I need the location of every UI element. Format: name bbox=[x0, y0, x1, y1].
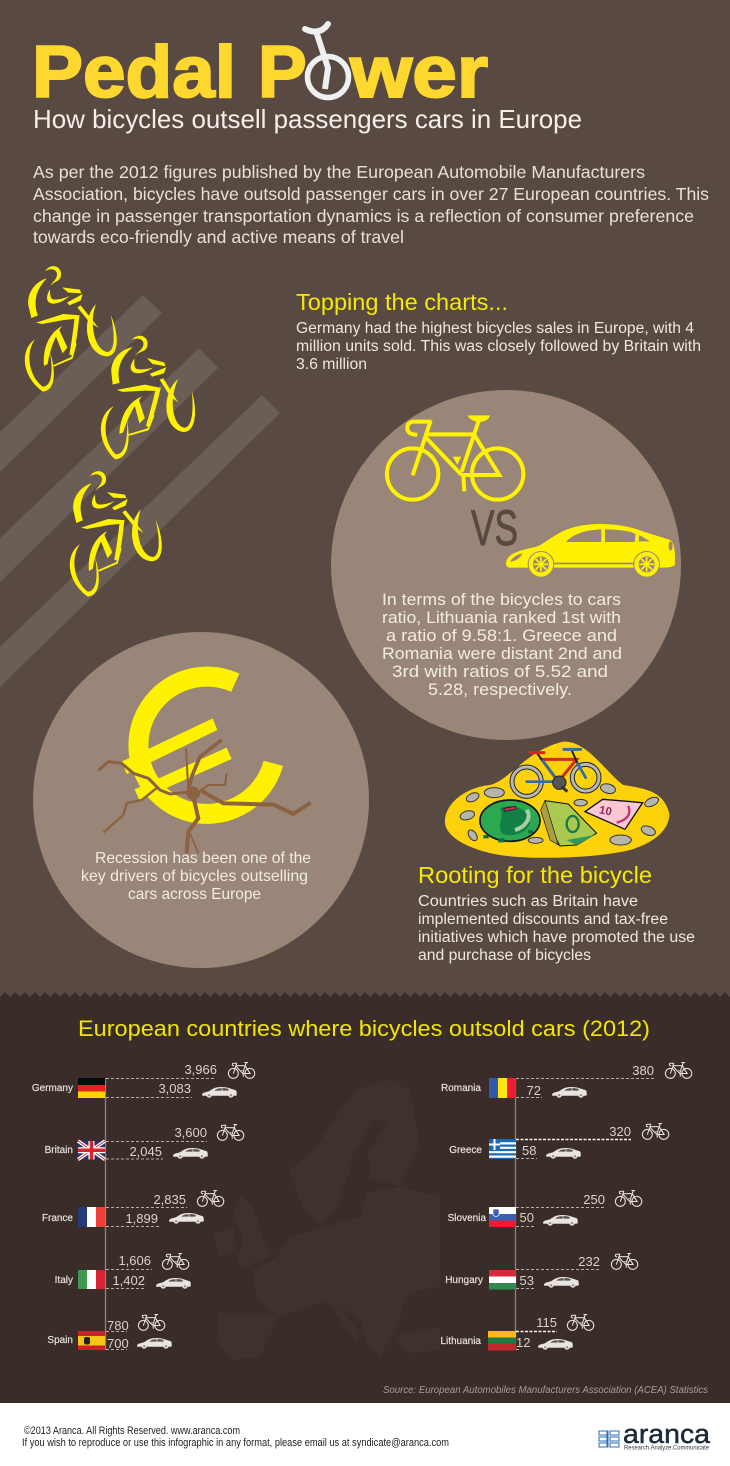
chart axes bbox=[106, 1078, 516, 1350]
title: Pedal Power bbox=[32, 32, 488, 113]
chart row: France: 2,835 bbox=[153, 1192, 186, 1207]
recession text: key drivers of bicycles outselling bbox=[81, 868, 308, 885]
chart row: Romania bbox=[441, 1062, 692, 1098]
chart row: Greece bbox=[449, 1123, 669, 1159]
chart row: Germany: Germany bbox=[32, 1083, 73, 1094]
footer copyright: If you wish to reproduce or use this infographic in any format, please email us at syndicate@aranca.com bbox=[22, 1437, 449, 1449]
recession text: Recession has been one of the bbox=[95, 850, 311, 867]
title: Pedal Power: wer bbox=[349, 32, 488, 113]
ratio text: In terms of the bicycles to cars bbox=[382, 590, 621, 609]
intro paragraph bbox=[33, 162, 709, 247]
chart row: Hungary: Hungary bbox=[445, 1275, 483, 1286]
chart row: Germany: 3,083 bbox=[158, 1081, 191, 1096]
chart row: Britain: Britain bbox=[45, 1145, 73, 1156]
section: topping the charts: million units sold. This was closely followed by Britain with bbox=[296, 338, 701, 355]
icon: bicycle, piggy bank, coins and banknotes on yellow blob: 10 bbox=[598, 804, 613, 818]
ratio text bbox=[382, 590, 622, 699]
section: topping the charts: Germany had the highest bicycles sales in Europe, with 4 bbox=[296, 320, 694, 337]
ratio text: 5.28, respectively. bbox=[428, 680, 572, 699]
chart row: Greece: 58 bbox=[522, 1143, 536, 1158]
title: Pedal Power: P bbox=[258, 32, 307, 113]
section: topping the charts: Topping the charts... bbox=[296, 289, 508, 315]
section: rooting for the bicycle: Countries such as Britain have bbox=[418, 893, 638, 910]
intro paragraph: change in passenger transportation dynamics is a reflection of consumer preference bbox=[33, 206, 694, 226]
chart row: Romania: 72 bbox=[527, 1083, 541, 1098]
icon: cracked euro bbox=[98, 677, 311, 853]
chart row: Hungary: 53 bbox=[520, 1273, 534, 1288]
chart row: Slovenia: Slovenia bbox=[448, 1213, 486, 1224]
chart row: Germany: 3,966 bbox=[184, 1062, 217, 1077]
diagonal road stripes bbox=[0, 295, 280, 687]
chart row: Spain bbox=[47, 1314, 172, 1351]
chart row: Romania: Romania bbox=[441, 1083, 481, 1094]
chart row: Slovenia: 50 bbox=[520, 1210, 534, 1225]
intro paragraph: Association, bicycles have outsold passenger cars in over 27 European countries. This bbox=[33, 184, 709, 204]
section: rooting for the bicycle: and purchase of bicycles bbox=[418, 947, 591, 964]
intro paragraph: As per the 2012 figures published by the European Automobile Manufacturers bbox=[33, 162, 645, 182]
chart row: France bbox=[42, 1190, 224, 1227]
footer copyright: ©2013 Aranca. All Rights Reserved. www.aranca.com bbox=[24, 1425, 240, 1437]
chart row: Greece: Greece bbox=[449, 1145, 482, 1156]
source note: Source: European Automobiles Manufacturers Association (ACEA) Statistics bbox=[383, 1385, 708, 1396]
chart row: Italy: 1,402 bbox=[112, 1273, 145, 1288]
icon: bicycle bbox=[387, 415, 523, 500]
section: rooting for the bicycle: initiatives which have promoted the use bbox=[418, 929, 695, 946]
icon: three yellow cyclists bbox=[25, 266, 204, 597]
chart row: Hungary: 232 bbox=[578, 1254, 600, 1269]
ratio text: a ratio of 9.58:1. Greece and bbox=[386, 626, 617, 645]
panel: recession circle bbox=[33, 632, 369, 968]
chart row: Greece: 320 bbox=[609, 1124, 631, 1139]
title: Pedal Power: Pedal bbox=[32, 32, 236, 113]
section: rooting for the bicycle: implemented discounts and tax-free bbox=[418, 911, 668, 928]
panel: dark chart section bbox=[0, 992, 730, 1403]
aranca logo bbox=[599, 1419, 711, 1452]
panel: bicycles vs cars circle bbox=[331, 390, 681, 740]
chart row: Romania: 380 bbox=[632, 1063, 654, 1078]
ratio text: Romania were distant 2nd and bbox=[382, 644, 622, 663]
chart row: Germany bbox=[32, 1062, 255, 1098]
footer copyright bbox=[22, 1425, 449, 1449]
aranca logo: aranca bbox=[623, 1419, 711, 1449]
chart row: Britain: 2,045 bbox=[129, 1144, 162, 1159]
VS label: VS bbox=[471, 500, 518, 556]
chart row: Spain: 700 bbox=[107, 1336, 129, 1351]
chart row: Lithuania: 115 bbox=[536, 1315, 557, 1330]
subtitle: How bicycles outsell passengers cars in Europe bbox=[33, 104, 582, 134]
chart row: Lithuania bbox=[440, 1314, 594, 1350]
chart row: Italy: Italy bbox=[55, 1275, 73, 1286]
chart row: Slovenia: 250 bbox=[583, 1192, 605, 1207]
chart row: France: 1,899 bbox=[125, 1211, 158, 1226]
section: rooting for the bicycle: Rooting for the bicycle bbox=[418, 862, 652, 888]
section: rooting for the bicycle bbox=[418, 862, 695, 964]
chart row: Lithuania: Lithuania bbox=[440, 1336, 481, 1347]
intro paragraph: towards eco-friendly and active means of travel bbox=[33, 227, 404, 247]
chart row: Lithuania: 12 bbox=[516, 1335, 530, 1350]
chart row: Italy: 1,606 bbox=[118, 1253, 151, 1268]
chart row: Spain: 780 bbox=[107, 1318, 129, 1333]
recession text bbox=[81, 850, 311, 903]
chart heading: European countries where bicycles outsold cars (2012) bbox=[78, 1016, 650, 1041]
section: topping the charts bbox=[296, 289, 701, 373]
icon: bicycle, piggy bank, coins and banknotes on yellow blob bbox=[445, 742, 669, 858]
icon: unicycle forming the letter o bbox=[305, 24, 348, 98]
chart row: Britain bbox=[45, 1124, 244, 1160]
recession text: cars across Europe bbox=[128, 886, 261, 903]
faint map of Europe bbox=[213, 1080, 440, 1360]
section: topping the charts: 3.6 million bbox=[296, 356, 367, 373]
footer panel bbox=[0, 1403, 730, 1466]
chart row: Britain: 3,600 bbox=[174, 1125, 207, 1140]
chart row: Italy bbox=[55, 1253, 191, 1289]
chart row: Spain: Spain bbox=[47, 1335, 73, 1346]
ratio text: ratio, Lithuania ranked 1st with bbox=[382, 608, 621, 627]
chart row: France: France bbox=[42, 1213, 73, 1224]
chart row: Slovenia bbox=[448, 1190, 642, 1227]
chart row: Hungary bbox=[445, 1253, 638, 1290]
aranca logo: Research.Analyze.Communicate bbox=[624, 1444, 709, 1452]
icon: car bbox=[506, 524, 675, 578]
ratio text: 3rd with ratios of 5.52 and bbox=[392, 662, 608, 681]
